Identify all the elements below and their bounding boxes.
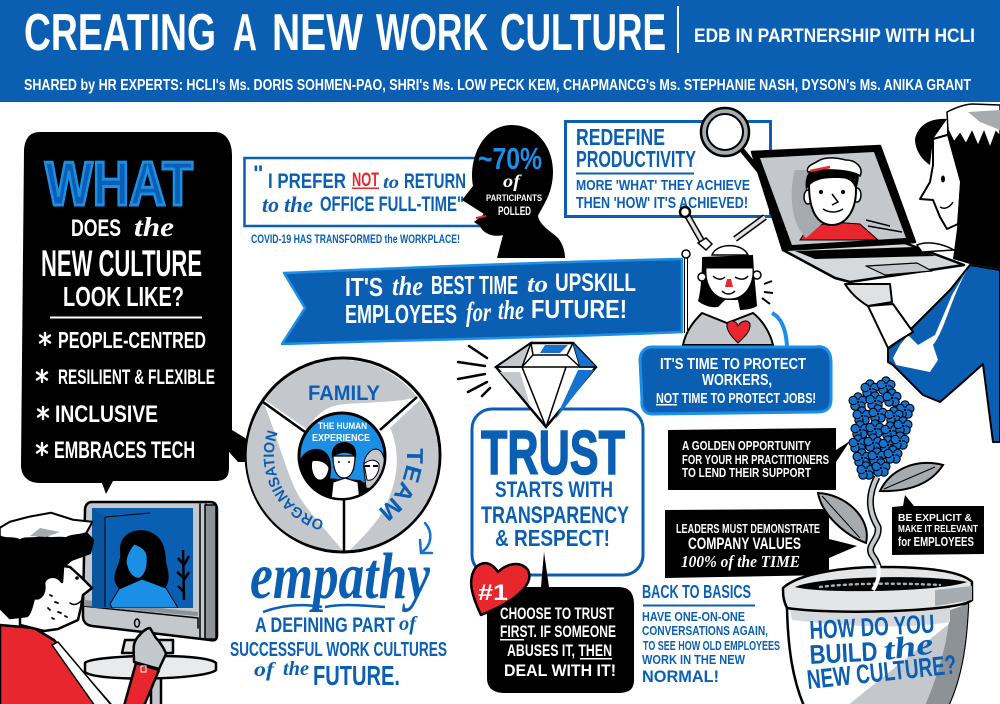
- callout: golden opportunity: A GOLDEN OPPORTUNITY: [682, 439, 812, 453]
- arrow: wheel to empathy: [420, 523, 432, 553]
- monitor button: [134, 619, 140, 627]
- silhouette head with statistic: [462, 125, 565, 258]
- quote text: I PREFER: [268, 170, 346, 193]
- wheel: the human experience: [244, 356, 442, 554]
- panel: trust: & RESPECT!: [495, 525, 610, 551]
- banner text: UPSKILL: [555, 269, 636, 297]
- text: defining part: SUCCESSFUL WORK CULTURES: [230, 639, 447, 661]
- text: defining part: of: [399, 613, 418, 635]
- icon: diamond: [458, 343, 596, 427]
- banner text: to: [527, 272, 548, 298]
- illustration: man at computer: [0, 502, 217, 704]
- speech bubble: protect workers: NOT TIME TO PROTECT JOBS!: [656, 390, 816, 407]
- text: back to basics: CONVERSATIONS AGAIN,: [642, 624, 768, 638]
- heading: REDEFINE: [576, 124, 665, 150]
- callout: be explicit: [892, 495, 984, 555]
- title: NEW: [272, 4, 364, 62]
- silhouette head with statistic: POLLED: [498, 204, 531, 218]
- text: defining part: [230, 613, 447, 691]
- heading: what: WHAT: [45, 150, 193, 219]
- question text: LOOK LIKE?: [63, 281, 184, 312]
- text: back to basics: NORMAL!: [642, 667, 719, 686]
- list of traits: PEOPLE-CENTRED: [58, 327, 206, 353]
- illustration: plant in pot: [783, 377, 972, 704]
- pot: [783, 567, 972, 704]
- monitor: [83, 502, 217, 640]
- speech bubble: protect workers: [640, 313, 831, 414]
- panel: trust: TRANSPARENCY: [481, 502, 629, 529]
- illustration: robot girl with heart: [680, 207, 773, 345]
- bubble text: IT'S TIME TO PROTECT: [660, 356, 806, 373]
- caption: covid: COVID-19 HAS TRANSFORMED the WORKPLACE!: [251, 232, 460, 246]
- panel: trust: [472, 409, 643, 575]
- pot text: HOW DO YOU: [809, 608, 935, 645]
- callout: be explicit: for EMPLOYEES: [898, 534, 974, 549]
- centre text: THE HUMAN: [318, 421, 367, 432]
- banner text: EMPLOYEES: [345, 299, 457, 329]
- callout: be explicit: MAKE IT RELEVANT: [898, 524, 978, 535]
- centre circle: EXPERIENCE: [312, 433, 370, 444]
- list of traits: INCLUSIVE: [55, 401, 158, 428]
- flowers: [849, 377, 914, 479]
- quote box: [244, 158, 484, 226]
- banner text: the: [498, 295, 524, 325]
- label: organisation: ORGANISATION: [264, 430, 322, 530]
- question text: the: [134, 212, 174, 242]
- quote text: NOT: [352, 170, 379, 191]
- title: WORK: [376, 4, 488, 62]
- question text: DOES: [71, 215, 121, 242]
- hair: [947, 104, 1000, 269]
- banner text: FUTURE!: [531, 294, 627, 324]
- banner text: [345, 269, 636, 329]
- illustration: woman holding laptop: [752, 104, 1000, 442]
- centre circle: [296, 413, 392, 500]
- text: defining part: A DEFINING PART: [255, 614, 395, 637]
- list of traits: [37, 327, 215, 464]
- callout: golden opportunity: [668, 428, 850, 490]
- text: back to basics: TO SEE HOW OLD EMPLOYEES: [643, 639, 780, 653]
- quote text: to: [262, 192, 279, 217]
- table: [85, 640, 216, 704]
- body and sleeve: [888, 265, 1000, 442]
- silhouette head with statistic: PARTICIPANTS: [486, 193, 542, 204]
- heading: trust: TRUST: [481, 419, 625, 488]
- man figure: [0, 513, 166, 704]
- quote text: the: [284, 192, 313, 217]
- speech bubble: choose to trust first: FIRST. IF SOMEONE: [500, 623, 616, 641]
- panel: redefine productivity: PRODUCTIVITY: [576, 146, 696, 172]
- pot text: the: [881, 627, 935, 667]
- callout: company values: LEADERS MUST DEMONSTRATE: [676, 522, 820, 536]
- face: [920, 130, 965, 229]
- statistic: ~70%: [478, 141, 542, 176]
- list of traits: RESILIENT & FLEXIBLE: [58, 366, 215, 389]
- partnership note: EDB IN PARTNERSHIP WITH HCLI: [694, 26, 975, 47]
- text: defining part: the: [283, 658, 309, 680]
- body: [683, 313, 773, 345]
- quote text: OFFICE FULL-TIME": [320, 193, 464, 216]
- laptop: [752, 146, 964, 282]
- bubble text: CHOOSE TO TRUST: [500, 605, 614, 623]
- man on laptop screen: [792, 158, 902, 240]
- callout: golden opportunity: TO LEND THEIR SUPPORT: [682, 466, 811, 480]
- quote text: ": [253, 161, 263, 186]
- banner text: for: [466, 297, 491, 327]
- title: [24, 4, 666, 62]
- callout: be explicit: BE EXPLICIT &: [898, 512, 972, 524]
- text: back to basics: [642, 582, 780, 686]
- hair and face: [698, 255, 757, 310]
- title: A: [233, 4, 257, 62]
- banner: best time to upskill: [282, 259, 682, 344]
- list of traits: EMBRACES TECH: [54, 437, 195, 464]
- text: back to basics: HAVE ONE-ON-ONE: [642, 610, 745, 624]
- callout: golden opportunity: FOR YOUR HR PRACTITIONERS: [682, 453, 829, 467]
- quote text: RETURN: [404, 170, 466, 193]
- header banner: [0, 0, 1000, 102]
- text: back to basics: BACK TO BASICS: [642, 582, 751, 602]
- question text: [41, 212, 202, 312]
- text: defining part: FUTURE.: [313, 660, 400, 691]
- callout: company values: 100% of the TIME: [681, 552, 800, 571]
- panel: redefine productivity: THEN 'HOW' IT'S ACHIEVED!: [576, 195, 748, 212]
- banner text: BEST TIME: [431, 270, 518, 300]
- pot text: [805, 608, 958, 695]
- icon: number one heart: [471, 563, 529, 615]
- pot text: BUILD: [809, 636, 878, 670]
- icon: magnifying glass: [701, 108, 760, 172]
- stem: [870, 477, 879, 590]
- text: back to basics: WORK IN THE NEW: [642, 653, 745, 667]
- label: team: TEAM: [378, 448, 423, 522]
- speech bubble: protect workers: WORKERS,: [702, 372, 772, 389]
- silhouette head with statistic: of: [503, 171, 522, 191]
- title: CULTURE: [500, 4, 666, 62]
- callout: company values: [665, 509, 857, 578]
- quote text: [253, 161, 466, 217]
- antenna: [684, 256, 688, 333]
- callout: company values: COMPANY VALUES: [688, 535, 801, 553]
- body text: STARTS WITH: [495, 477, 613, 502]
- panel: what does the new culture look like: [21, 132, 254, 494]
- title: CREATING: [24, 4, 216, 62]
- text: defining part: of: [254, 659, 277, 681]
- speech bubble: choose to trust first: ABUSES IT, THEN: [507, 642, 612, 660]
- banner text: IT'S: [345, 272, 383, 302]
- tools: [680, 207, 765, 250]
- body: MORE 'WHAT' THEY ACHIEVE: [576, 177, 750, 194]
- text: empathy: empathy: [250, 540, 431, 613]
- ring segments grey: [265, 360, 417, 430]
- speech bubble: choose to trust first: [487, 552, 634, 693]
- leaves: [880, 463, 943, 491]
- stem base over soil: [873, 565, 879, 590]
- icon: number one heart: #1: [478, 580, 508, 605]
- monitor screen: video call: [92, 508, 193, 608]
- banner text: the: [392, 271, 423, 301]
- label: family: FAMILY: [308, 382, 380, 405]
- panel: redefine productivity: [566, 122, 770, 216]
- speech bubble: choose to trust first: DEAL WITH IT!: [504, 661, 616, 680]
- question text: NEW CULTURE: [41, 243, 202, 284]
- quote text: to: [383, 172, 399, 192]
